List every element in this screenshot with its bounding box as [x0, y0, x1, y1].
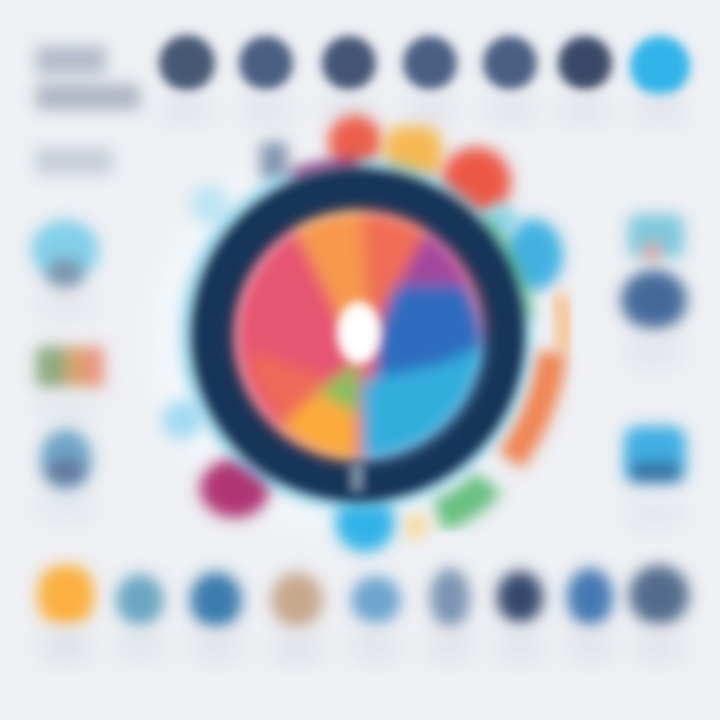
slice: orange: [295, 212, 370, 330]
segment: teal gear tooth: [482, 204, 518, 240]
segment: red right: [441, 147, 511, 217]
segment: pale blue upper left: [190, 185, 230, 225]
slice: cyan: [362, 345, 484, 460]
segment: blue right: [503, 219, 563, 291]
slice: red-orange: [362, 212, 436, 320]
slice: purple: [395, 232, 470, 290]
left icon: multicolour bars: [36, 346, 104, 388]
bottom row of icons: [38, 565, 689, 628]
segment: magenta: [200, 458, 270, 518]
segment: light blue left: [162, 400, 202, 440]
bottom row captions: [44, 632, 680, 660]
white centre: [337, 302, 381, 364]
segment: cream chip: [403, 513, 429, 539]
segment: amber top: [384, 126, 442, 180]
left icon: blue figure: [40, 428, 92, 492]
outer segments around the wheel: [162, 115, 566, 552]
segment: orange thin arc: [556, 296, 566, 350]
top row of icons: [159, 35, 690, 96]
pale gear halo behind the wheel: [150, 150, 530, 530]
slice: pink-red: [236, 226, 358, 425]
segment: orange arc: [510, 352, 552, 460]
slice: blue: [375, 285, 484, 385]
slice: green: [318, 360, 358, 415]
segment: red top: [328, 115, 382, 169]
subtitle text block: [36, 148, 112, 174]
slice: yellow: [282, 390, 356, 460]
right icon: blue card: [624, 426, 686, 484]
title block: [36, 46, 140, 110]
right icon: dark blue circle: [621, 270, 687, 330]
cyan and green ring glow: [188, 166, 526, 502]
navy ring: [214, 191, 502, 479]
divider at bottom of pie: [350, 462, 364, 492]
small icon: top left of wheel: [260, 142, 288, 180]
left captions: [40, 296, 92, 516]
left icon: light blue badge: [31, 220, 99, 290]
segment: green arc: [438, 482, 488, 515]
right captions: [628, 340, 680, 524]
segment: cyan bottom: [335, 492, 395, 552]
top row captions: [165, 100, 682, 122]
pie chart: [235, 211, 485, 461]
right icon: teal banner: [628, 214, 684, 262]
slice: coral lower left: [250, 350, 330, 425]
